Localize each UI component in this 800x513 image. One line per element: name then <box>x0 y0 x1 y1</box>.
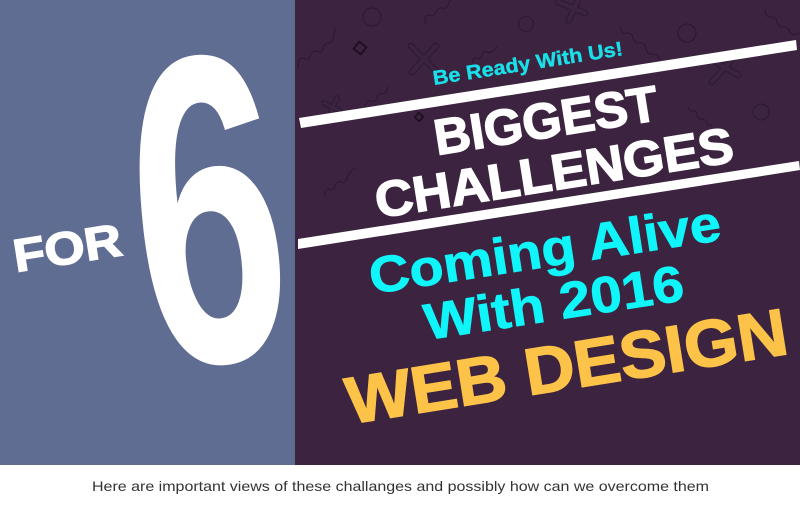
heading: With 2016: With 2016 <box>420 254 688 351</box>
panel: left blue background <box>0 0 295 465</box>
heading: Coming Alive: Coming Alive <box>365 194 725 305</box>
upper white rule <box>299 40 797 128</box>
decorative shape pattern <box>298 0 800 197</box>
heading: Biggest: BIGGEST <box>430 75 662 166</box>
heading: Challenges: CHALLENGES <box>371 117 737 229</box>
panel: right purple background <box>295 0 800 465</box>
heading: Web Design: WEB DESIGN <box>341 294 793 438</box>
tagline: Be Ready With Us: Be Ready With Us! <box>431 38 624 90</box>
caption: Here are important views of these challanges and possibly how can we overcome them <box>92 478 709 494</box>
lower white rule <box>298 161 800 249</box>
label: FOR: FOR <box>9 213 125 282</box>
